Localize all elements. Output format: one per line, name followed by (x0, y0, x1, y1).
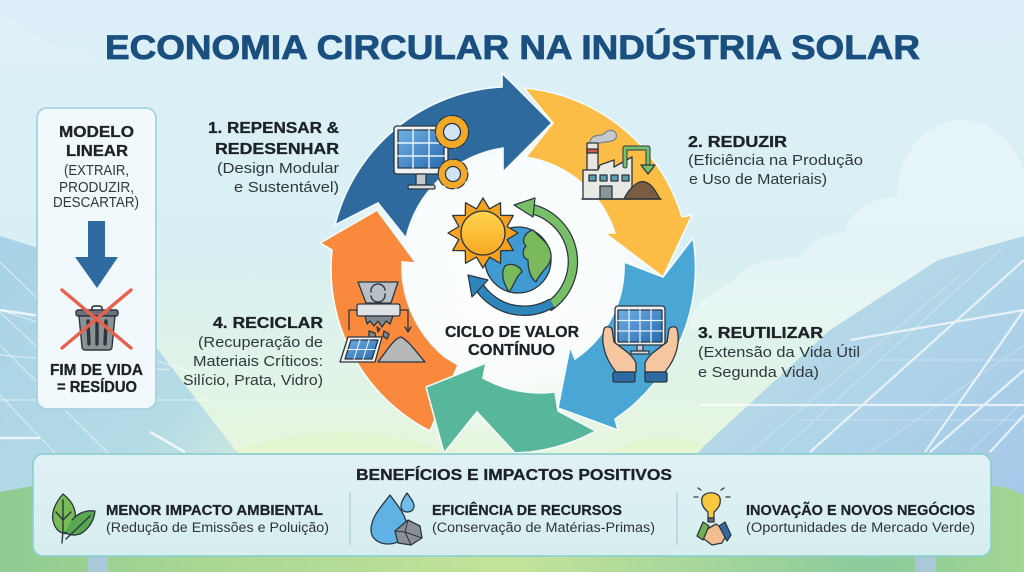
label: repensar e redesenhar: (Design Modular (217, 161, 339, 177)
label: reciclar: (Recuperação de (198, 335, 323, 351)
heading: modelo linear: MODELO (59, 124, 134, 141)
label: reciclar: Materiais Críticos: (193, 354, 323, 370)
heading: beneficios e impactos: BENEFÍCIOS E IMPACTOS POSITIVOS (356, 467, 672, 484)
text: inovacao e novos negocios: INOVAÇÃO E NOVOS NEGÓCIOS (746, 501, 975, 519)
text: menor impacto ambiental (106, 503, 329, 535)
icon: down arrow (75, 221, 118, 288)
icon: blue cycle arrow (468, 275, 552, 311)
label: reutilizar: 3. REUTILIZAR (698, 325, 823, 342)
label: repensar e redesenhar: e Sustentável) (234, 180, 339, 196)
icon: crossed out trash can (62, 290, 131, 350)
text: fim de vida: FIM DE VIDA (50, 362, 143, 379)
label: reutilizar (698, 325, 860, 381)
text: inovacao e novos negocios (746, 501, 975, 535)
icon: sun (448, 198, 518, 268)
arrow: green (426, 363, 596, 453)
text: ciclo de valor continuo: CONTÍNUO (468, 342, 555, 359)
panel: modelo linear (37, 108, 156, 409)
text: extrair produzir descartar: DESCARTAR) (53, 195, 139, 211)
icon: water drops and rock (371, 493, 422, 545)
label: reutilizar: (Extensão da Vida Útil (698, 344, 860, 361)
icon: light bulb and handshake (694, 488, 731, 545)
label: reduzir: e Uso de Materiais) (689, 172, 827, 188)
text: menor impacto ambiental: MENOR IMPACTO AMBIENTAL (106, 503, 323, 519)
label: reciclar: Silício, Prata, Vidro) (183, 373, 323, 389)
title: ECONOMIA CIRCULAR NA INDÚSTRIA SOLAR (105, 29, 920, 67)
icon: globe (485, 227, 551, 293)
icon: solar panel and gears (394, 118, 466, 189)
label: reciclar: 4. RECICLAR (213, 315, 323, 332)
icon: hands holding solar panel (603, 306, 678, 382)
label: reduzir (688, 134, 863, 188)
text: fim de vida (50, 362, 143, 396)
label: reduzir: (Eficiência na Produção (688, 153, 863, 169)
text: eficiencia de recursos (432, 501, 655, 535)
text: fim de vida: = RESÍDUO (57, 379, 137, 396)
text: eficiencia de recursos: EFICIÊNCIA DE RECURSOS (432, 501, 622, 519)
text: ciclo de valor continuo (445, 324, 579, 359)
arrow: reutilizar light blue (558, 238, 695, 430)
icon: factory with material loop (582, 130, 661, 199)
central emblem (445, 198, 579, 359)
icon: leaves (53, 494, 95, 543)
text: inovacao e novos negocios: (Oportunidades de Mercado Verde) (746, 520, 975, 535)
text: extrair produzir descartar: (EXTRAIR, (64, 163, 129, 179)
text: ciclo de valor continuo: CICLO DE VALOR (445, 324, 579, 341)
text: extrair produzir descartar: PRODUZIR, (59, 180, 134, 196)
arrow: reduzir yellow (524, 88, 692, 277)
text: eficiencia de recursos: (Conservação de Matérias-Primas) (432, 520, 655, 535)
circular arrows (320, 73, 695, 453)
text: extrair produzir descartar (53, 163, 139, 211)
label: repensar e redesenhar (208, 120, 339, 196)
arrow: reciclar orange (320, 210, 458, 431)
icon: shredder recycling panels (340, 282, 425, 362)
heading: modelo linear (59, 124, 134, 160)
label: repensar e redesenhar: REDESENHAR (215, 141, 339, 158)
text: menor impacto ambiental: (Redução de Emissões e Poluição) (106, 520, 329, 535)
panel: beneficios (33, 454, 991, 556)
heading: modelo linear: LINEAR (66, 143, 128, 160)
arrow: repensar dark blue (335, 73, 552, 238)
label: reduzir: 2. REDUZIR (688, 134, 787, 151)
label: reciclar (183, 315, 323, 389)
icon: green cycle arrow (514, 198, 573, 307)
label: repensar e redesenhar: 1. REPENSAR & (208, 120, 339, 137)
label: reutilizar: e Segunda Vida) (698, 365, 819, 381)
